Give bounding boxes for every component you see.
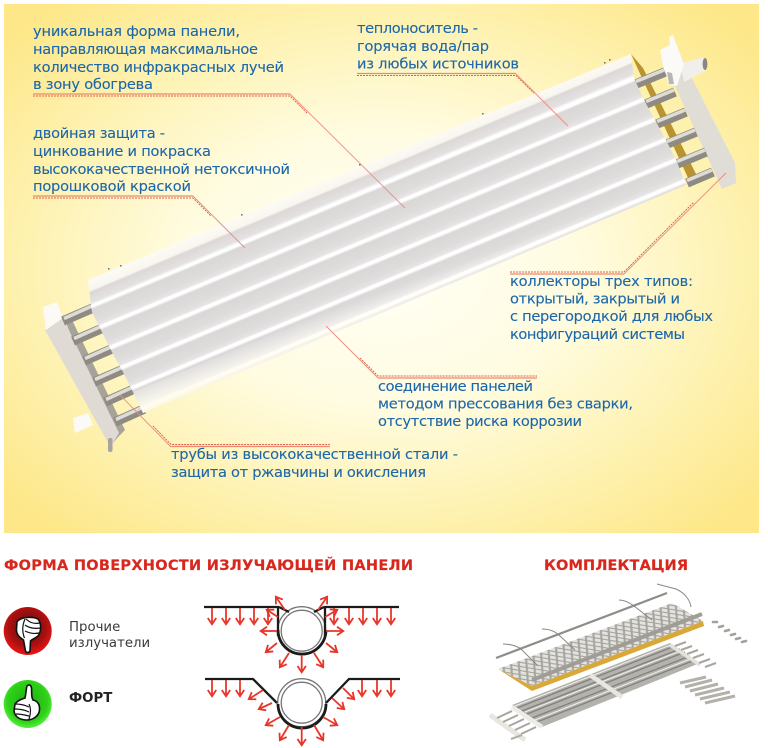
right collector xyxy=(660,35,736,189)
mounting rods and hangers xyxy=(496,584,702,680)
callout: collectors: открытый, закрытый и xyxy=(510,290,680,308)
label: other emitters: излучатели xyxy=(69,636,150,651)
callout: collectors xyxy=(510,173,726,343)
mounting specks xyxy=(108,59,611,270)
corrugated panel body xyxy=(88,54,686,413)
callout: heat carrier: из любых источников xyxy=(357,56,519,72)
callout: collectors: с перегородкой для любых xyxy=(510,308,713,325)
clips xyxy=(713,622,746,642)
callout: panel shape: количество инфракрасных лучей xyxy=(33,59,284,76)
callout: panel joint: отсутствие риска коррозии xyxy=(378,413,582,430)
heading: kit: КОМПЛЕКТАЦИЯ xyxy=(544,558,688,574)
callout: double protection: высококачественной нетоксичной xyxy=(33,161,290,178)
callout: panel joint: соединение панелей xyxy=(378,378,533,395)
callout: panel shape xyxy=(33,23,405,208)
callout: panel shape: направляющая максимальное xyxy=(33,41,258,58)
left pipes xyxy=(63,306,144,422)
callout: heat carrier: горячая вода/пар xyxy=(357,38,489,55)
callout: double protection: двойная защита - xyxy=(33,125,165,142)
pipe panel xyxy=(512,643,700,727)
icon: thumbs down xyxy=(4,607,52,655)
callout: steel pipes: трубы из высококачественной стали - xyxy=(171,446,458,463)
icon: thumbs up xyxy=(4,680,52,728)
callout: double protection xyxy=(33,125,290,248)
left collector xyxy=(43,302,125,452)
callout: double protection: цинкование и покраска xyxy=(33,143,211,160)
illustration: kit exploded view xyxy=(490,584,746,740)
callout: steel pipes xyxy=(120,395,458,481)
diagram: other emitters radiation xyxy=(204,597,399,672)
callout: collectors: коллекторы трех типов: xyxy=(510,273,693,290)
callout: double protection: порошковой краской xyxy=(33,178,191,195)
callout: steel pipes: защита от ржавчины и окисления xyxy=(171,464,426,481)
brackets xyxy=(680,677,735,703)
callout: panel shape: уникальная форма панели, xyxy=(33,23,240,40)
callout: panel joint xyxy=(326,326,633,430)
label: FORT: ФОРТ xyxy=(69,691,112,706)
callout: heat carrier: теплоноситель - xyxy=(357,20,478,37)
right pipes xyxy=(636,70,713,183)
left collector and stubs xyxy=(490,711,536,740)
callout: heat carrier xyxy=(357,20,568,126)
callout: collectors: конфигураций системы xyxy=(510,326,685,343)
label: other emitters xyxy=(69,620,150,651)
diagram: FORT radiation xyxy=(205,679,400,745)
label: other emitters: Прочие xyxy=(69,620,120,635)
panel: yellow product background xyxy=(4,4,759,533)
insulation edge xyxy=(631,54,697,180)
right stubs xyxy=(675,642,716,667)
callout: panel joint: методом прессования без сварки, xyxy=(378,396,633,412)
callout: panel shape: в зону обогрева xyxy=(33,76,153,93)
heading: surface shape: ФОРМА ПОВЕРХНОСТИ ИЗЛУЧАЮЩЕЙ ПАНЕЛИ xyxy=(4,557,413,574)
insulation layer xyxy=(498,603,704,691)
radiant panel illustration xyxy=(43,35,736,452)
